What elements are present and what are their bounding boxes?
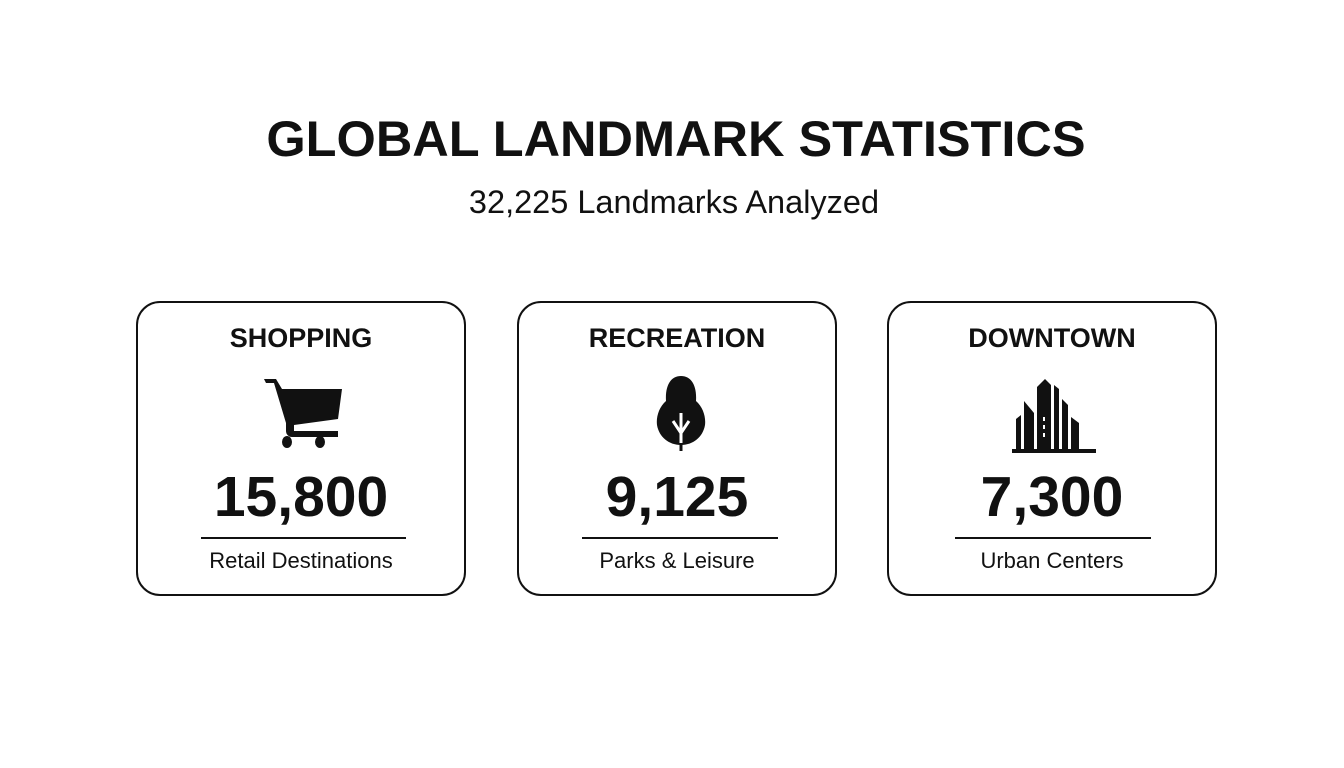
icon: shopping cart [264, 379, 342, 448]
label: Retail Destinations [209, 548, 393, 573]
title: GLOBAL LANDMARK STATISTICS [266, 110, 1086, 167]
heading: recreation: RECREATION [589, 323, 765, 353]
heading: downtown: DOWNTOWN [968, 323, 1136, 353]
number: 15,800 [214, 465, 388, 529]
icon: tree [656, 376, 706, 451]
subtitle: 32,225 Landmarks Analyzed [469, 184, 879, 220]
panel: shopping [136, 301, 466, 596]
label: Parks & Leisure [599, 548, 755, 573]
label: Urban Centers [980, 548, 1124, 573]
panel: recreation [517, 301, 837, 596]
icon: buildings [1012, 379, 1096, 453]
number: 9,125 [606, 465, 748, 529]
number: 7,300 [981, 465, 1123, 529]
heading: shopping: SHOPPING [230, 323, 372, 353]
panel: downtown [887, 301, 1217, 596]
